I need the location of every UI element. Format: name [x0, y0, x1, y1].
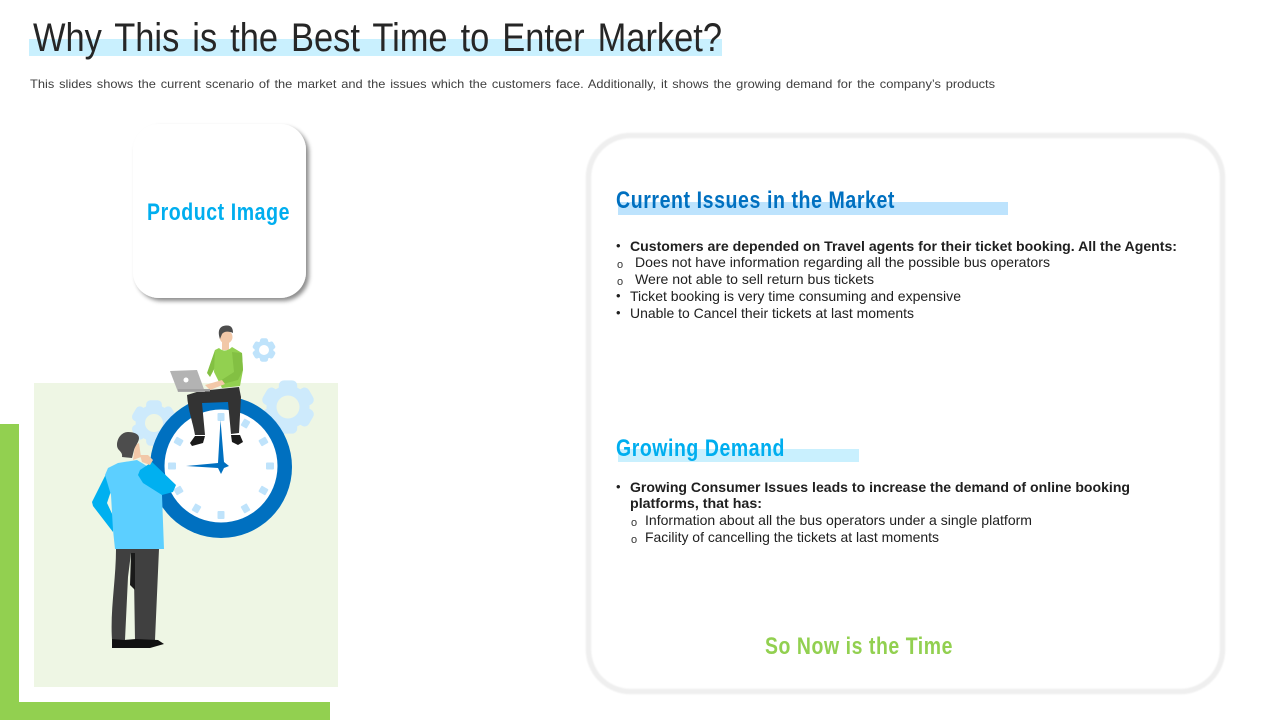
text block: current issues list: [616, 238, 1177, 321]
text block: current issues list: o: [617, 276, 623, 288]
text block: current issues list: Customers are depended on Travel agents for their ticket booking. All the Agents:: [630, 238, 1177, 254]
text block: current issues list: •: [616, 305, 621, 320]
clock: [150, 396, 292, 538]
text block: growing demand list: o: [631, 517, 637, 529]
panel: product image placeholder: Product Image: [147, 199, 290, 226]
text block: growing demand list: platforms, that has:: [630, 495, 762, 511]
text block: growing demand list: Growing Consumer Issues leads to increase the demand of online booking: [630, 479, 1130, 495]
illustration: people and clock: [92, 325, 316, 648]
icon: left gear: [130, 400, 178, 446]
text block: growing demand list: Facility of cancelling the tickets at last moments: [645, 529, 939, 545]
text block: current issues list: Were not able to sell return bus tickets: [635, 271, 874, 287]
title: Why This is the Best Time to Enter Market?: [33, 16, 722, 60]
text block: current issues list: •: [616, 288, 621, 303]
subtitle: This slides shows the current scenario of the market and the issues which the customers face. Additionally, it shows the growing demand for the company’s products: [30, 77, 995, 91]
icon: small gear: [252, 338, 276, 362]
figure: man in blue looking at clock: [92, 432, 176, 648]
text block: growing demand list: •: [616, 479, 621, 494]
panel: market content: [588, 136, 1222, 692]
text block: growing demand list: [616, 479, 1130, 546]
text block: current issues list: Unable to Cancel their tickets at last moments: [630, 305, 914, 321]
heading: current issues: Current Issues in the Market: [616, 187, 895, 214]
heading: growing demand: Growing Demand: [616, 435, 785, 462]
icon: large gear: [260, 380, 316, 434]
figure: man sitting with laptop: [170, 325, 243, 446]
illustration background: [34, 383, 338, 687]
text block: current issues list: o: [617, 259, 623, 271]
text block: current issues list: •: [616, 238, 621, 253]
text block: growing demand list: Information about all the bus operators under a single platform: [645, 512, 1032, 528]
text block: current issues list: Ticket booking is very time consuming and expensive: [630, 288, 961, 304]
callout: so now is the time: So Now is the Time: [765, 633, 953, 660]
text block: growing demand list: o: [631, 534, 637, 546]
text block: current issues list: Does not have information regarding all the possible bus operators: [635, 254, 1050, 270]
panel: product image placeholder: [133, 124, 306, 298]
green corner frame: [0, 424, 330, 720]
